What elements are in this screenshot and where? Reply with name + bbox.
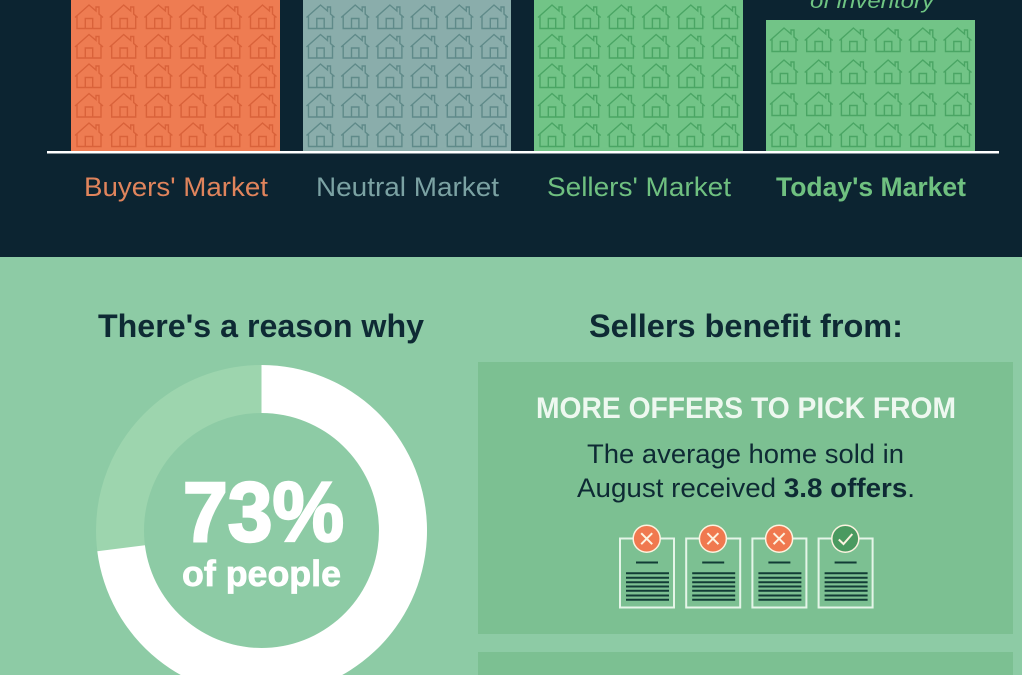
icon: offer document rejected 3 [752,525,806,608]
donut chart: 73% of people [97,365,427,675]
icon: offer document rejected 2 [686,525,740,608]
panel body text: August received 3.8 offers. [577,473,915,503]
label: today's market: Today's Market [776,172,966,202]
panel: market comparison (dark section) [0,0,1022,257]
panel body text [577,439,915,503]
label: sellers' market: Sellers' Market [547,172,732,202]
icon: offer document rejected 1 [620,525,674,608]
panel: more offers to pick from [478,362,1013,634]
icon: offer document accepted [819,525,873,608]
heading: there's a reason why: There's a reason why [98,308,424,344]
caption: of people: of people [182,553,341,594]
bar: buyers' market [71,0,280,151]
panel title: MORE OFFERS TO PICK FROM [536,392,956,425]
value: 73%: 73% [183,465,344,559]
panel body text: The average home sold in [587,439,904,469]
bar: sellers' market [534,0,743,151]
panel: next benefit (cropped) [478,652,1013,675]
bar: neutral market [303,0,511,151]
label: buyers' market: Buyers' Market [84,172,268,202]
label: neutral market: Neutral Market [316,172,500,202]
panel: green section background [0,257,1022,675]
bar: today's market [766,20,975,151]
heading: sellers benefit from: Sellers benefit from: [589,308,903,344]
